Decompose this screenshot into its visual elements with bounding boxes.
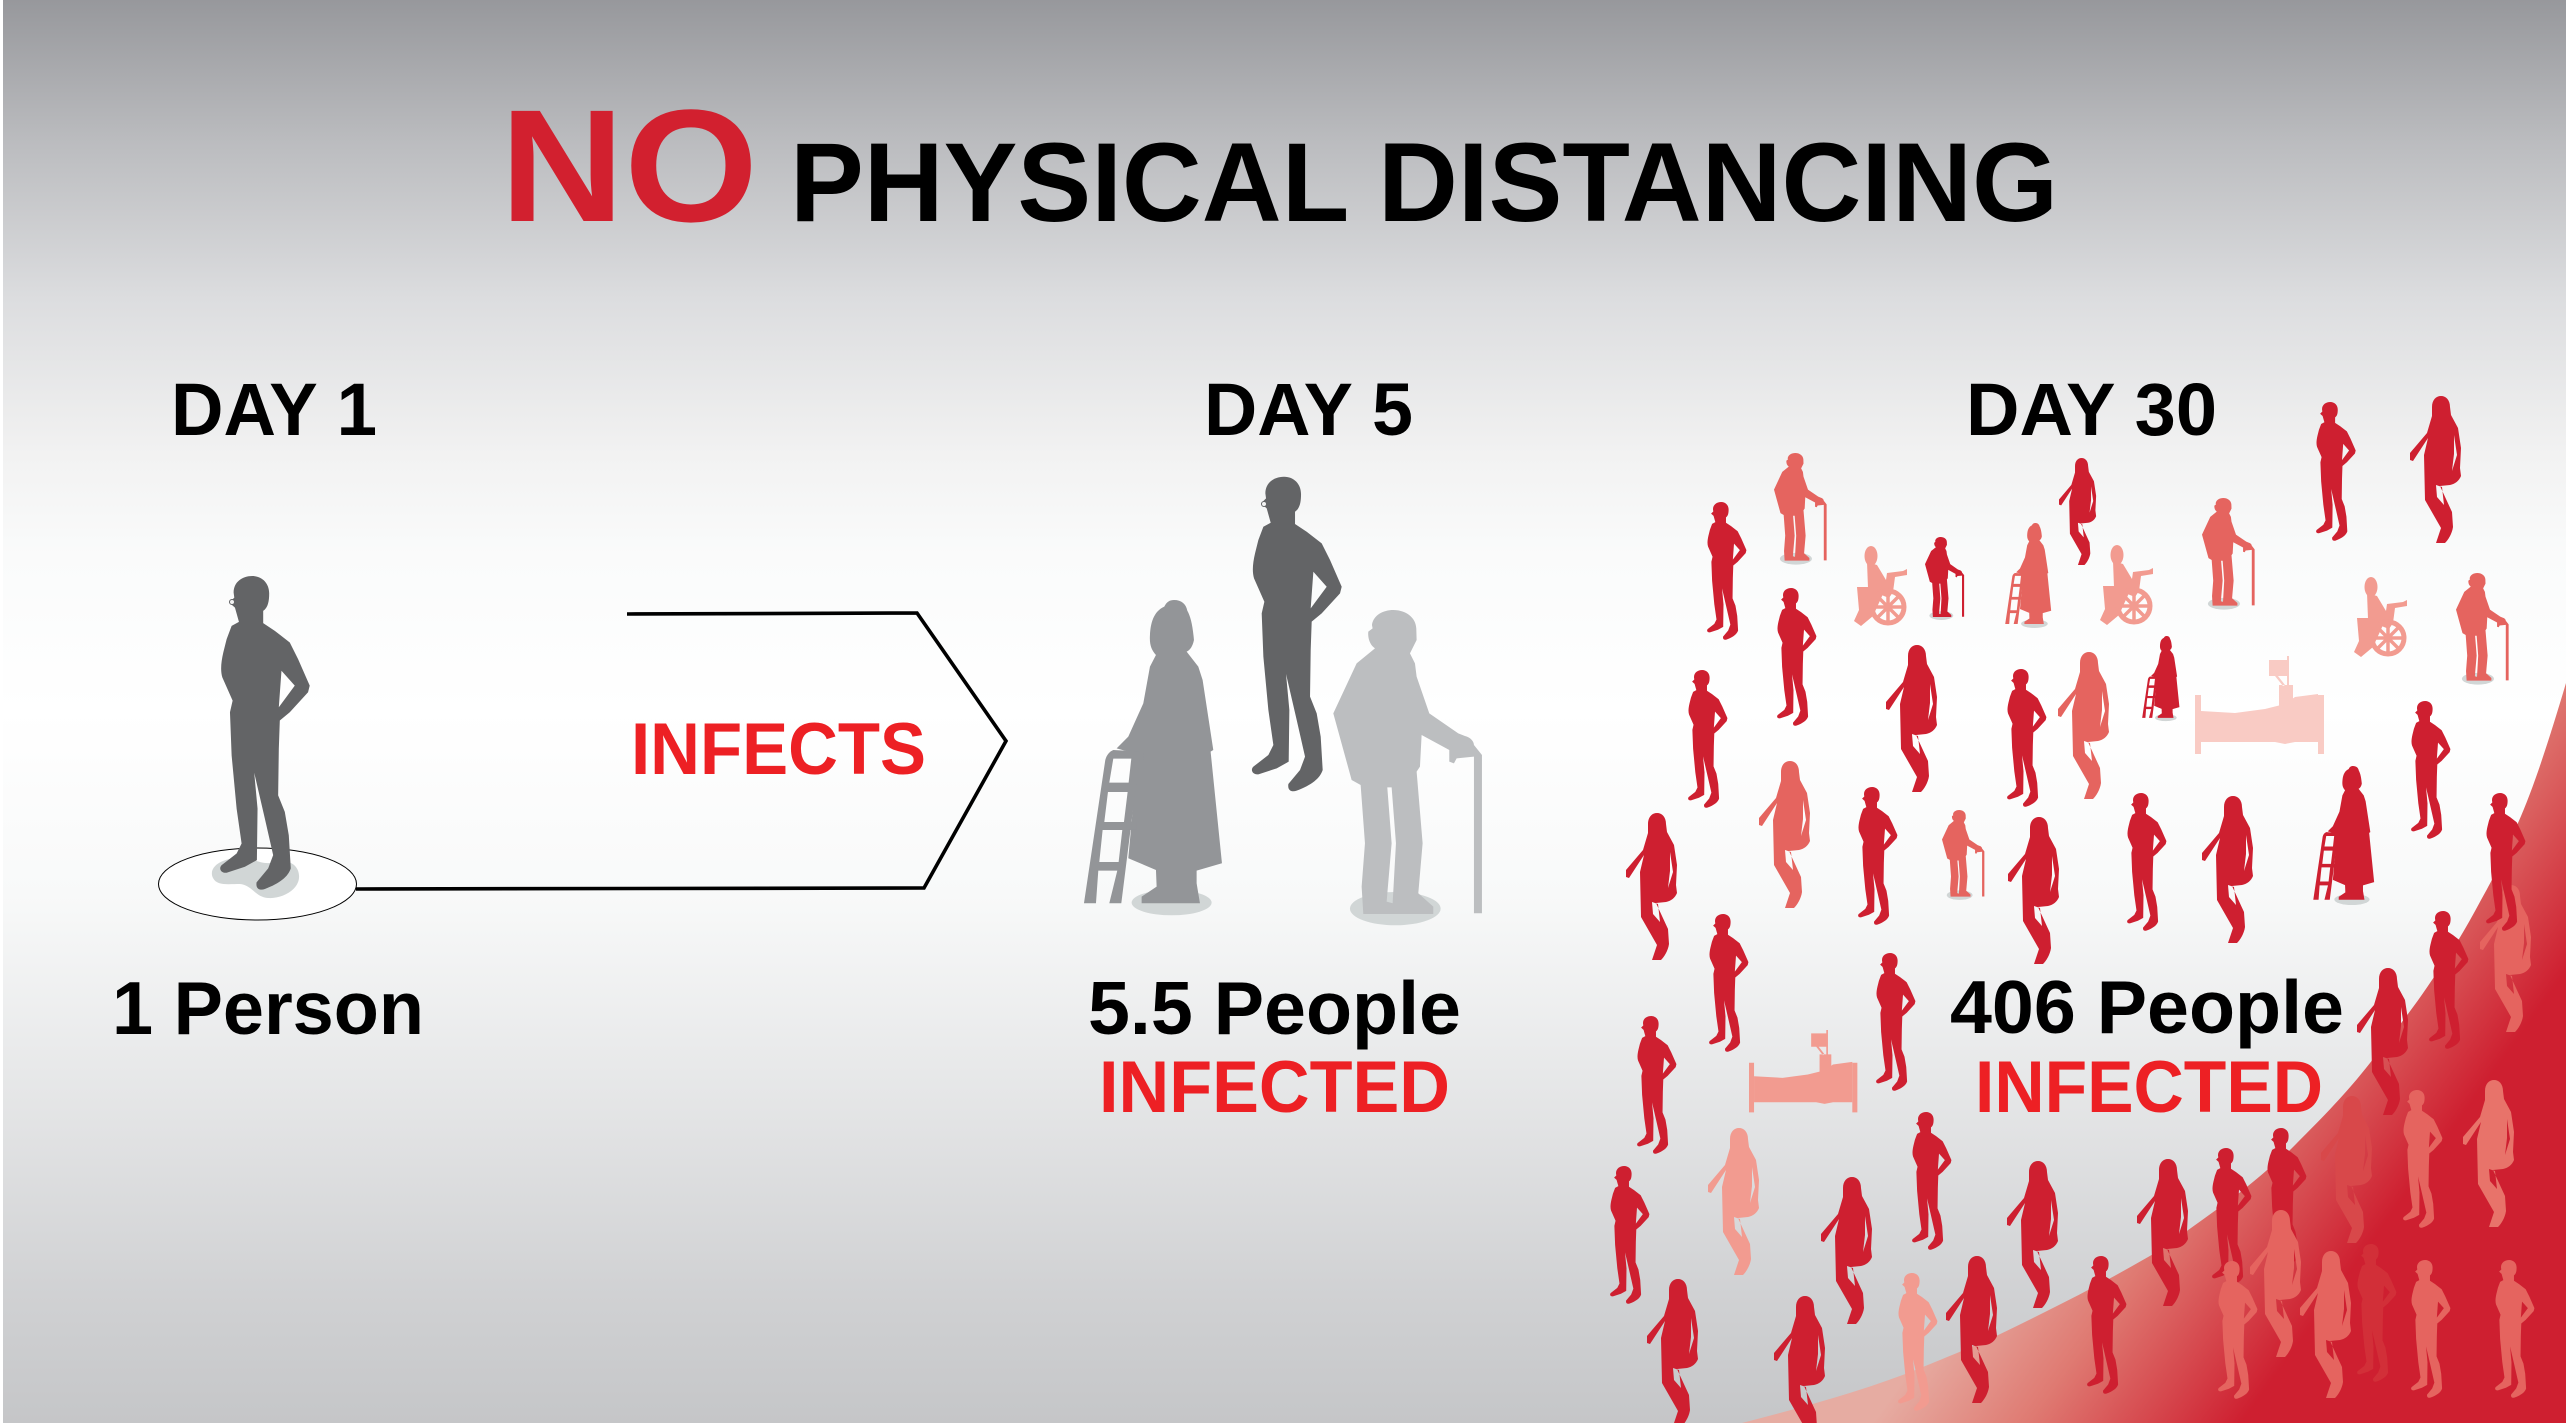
figure <box>2354 577 2407 657</box>
icon: hospital bed <box>2195 656 2324 754</box>
figure <box>1708 1128 1759 1275</box>
figure <box>1821 1177 1872 1324</box>
figure <box>2218 1261 2257 1399</box>
figure <box>1709 914 1748 1052</box>
figure <box>2087 1256 2126 1394</box>
figure <box>1876 953 1915 1091</box>
floor circle <box>158 848 356 920</box>
figure <box>2202 498 2255 610</box>
arrow: infects <box>356 613 1006 889</box>
icon: glasses day 1 <box>230 600 234 604</box>
figure <box>2357 1244 2396 1382</box>
heading: day 5: DAY 5 <box>1204 368 1413 451</box>
figure <box>2202 796 2253 943</box>
crowd of infected people <box>1610 396 2534 1423</box>
figure <box>1774 453 1827 565</box>
heading: day 30: DAY 30 <box>1966 368 2217 451</box>
day 5 people group <box>1084 477 1482 925</box>
icon: old woman with walker <box>1084 600 1222 915</box>
figure <box>2058 652 2109 799</box>
figure <box>2313 766 2374 905</box>
figure <box>1886 645 1937 792</box>
icon: man with glasses <box>1252 477 1342 791</box>
title <box>500 76 2058 255</box>
arrow label: INFECTS <box>631 709 926 790</box>
figure <box>2321 1096 2372 1243</box>
label: 1 person: 1 Person <box>112 966 424 1050</box>
figure <box>2486 793 2525 931</box>
exponential growth curve area <box>1742 683 2566 1423</box>
figure <box>2411 701 2450 839</box>
figure <box>2007 669 2046 807</box>
heading: day 1: DAY 1 <box>171 368 377 451</box>
figure <box>2127 793 2166 931</box>
figure <box>2250 1210 2301 1357</box>
figure <box>1858 787 1897 925</box>
figure <box>1759 761 1810 908</box>
left edge strip <box>0 0 3 1423</box>
figure <box>2357 968 2408 1115</box>
figure clipped by curve <box>2480 885 2531 1032</box>
figure <box>1647 1279 1698 1423</box>
figure <box>2495 1260 2534 1398</box>
figure <box>2429 911 2468 1049</box>
foot shadow <box>212 858 299 898</box>
figure <box>2316 402 2356 541</box>
icon: hospital bed small <box>1749 1030 1857 1112</box>
icon: glasses day 5 <box>1262 502 1266 506</box>
day 1 person group <box>158 576 356 920</box>
figure <box>1925 537 1964 620</box>
figure <box>2137 1159 2188 1306</box>
figure <box>2410 396 2461 543</box>
label: 406 people: 406 People <box>1950 965 2344 1049</box>
figure <box>1946 1256 1997 1403</box>
figure <box>1774 1296 1825 1423</box>
icon: old man with cane <box>1333 610 1482 925</box>
figure <box>2403 1090 2442 1228</box>
figure <box>2300 1251 2351 1398</box>
figure <box>2267 1128 2306 1266</box>
figure <box>2007 1161 2058 1308</box>
figure <box>2411 1260 2450 1398</box>
figure <box>2142 636 2179 721</box>
figure <box>1898 1273 1937 1411</box>
figure <box>1610 1166 1649 1304</box>
figure <box>2100 545 2153 625</box>
figure <box>2008 817 2059 964</box>
icon: person day 1 <box>220 576 310 890</box>
label: infected day 5: INFECTED <box>1099 1047 1450 1128</box>
figure <box>1688 670 1727 808</box>
label: infected day 30: INFECTED <box>1975 1047 2323 1128</box>
figure <box>2005 523 2051 628</box>
figure <box>1626 813 1677 960</box>
figure <box>2212 1148 2251 1286</box>
label: 5.5 people: 5.5 People <box>1088 966 1461 1050</box>
figure <box>1777 588 1816 726</box>
figure <box>2463 1080 2514 1227</box>
figure <box>2456 573 2509 685</box>
title word: NO: NO <box>500 76 758 255</box>
title words: PHYSICAL DISTANCING: PHYSICAL DISTANCING <box>790 120 2058 245</box>
figure <box>2059 458 2096 565</box>
figure <box>1707 502 1746 640</box>
figure <box>1942 810 1984 900</box>
figure <box>1854 546 1907 626</box>
figure <box>1912 1112 1951 1250</box>
figure <box>1637 1016 1676 1154</box>
